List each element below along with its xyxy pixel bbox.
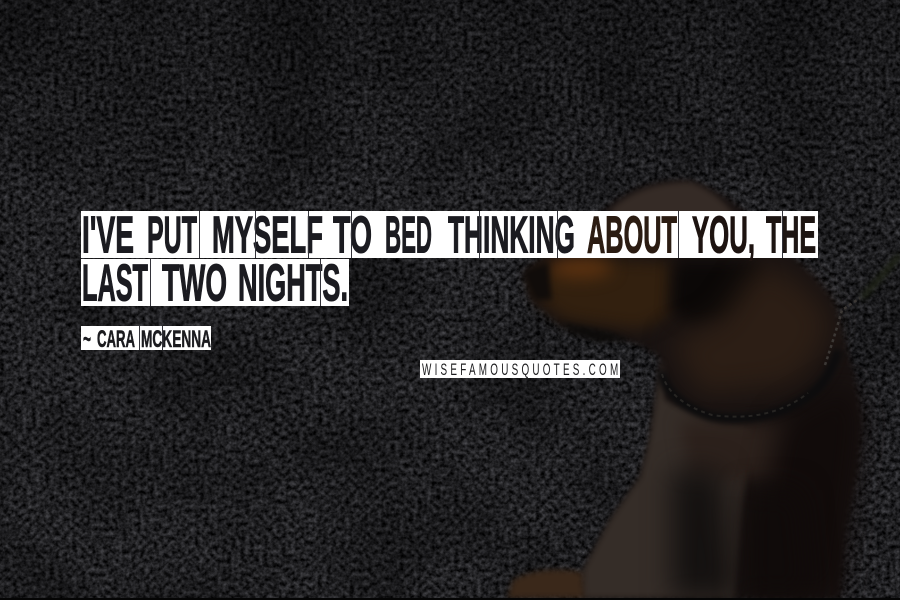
quote line 1: TO xyxy=(333,207,372,265)
muzzle warm patch xyxy=(548,258,612,278)
quote line 1: BED xyxy=(385,207,432,265)
chest light fur xyxy=(582,360,750,598)
neck fur xyxy=(670,262,830,395)
author attribution: CARA xyxy=(97,326,135,353)
quote line 1: MYSELF xyxy=(212,207,323,265)
quote text block xyxy=(81,207,818,312)
quote line 2: TWO xyxy=(162,254,227,312)
quote line 1: I'VE xyxy=(82,207,134,265)
dog photograph xyxy=(507,180,900,598)
quote line 1: THINKING xyxy=(448,207,575,265)
quote line 2 xyxy=(81,254,349,312)
upper chest warm fur xyxy=(680,420,800,480)
quote line 1 xyxy=(81,207,818,265)
ear xyxy=(672,262,770,325)
author attribution: MCKENNA xyxy=(141,326,211,353)
second front leg xyxy=(745,490,810,598)
dog body silhouette xyxy=(524,180,862,598)
muzzle xyxy=(530,258,672,330)
jaw shadow xyxy=(560,322,630,343)
right body shadow xyxy=(745,380,862,598)
author attribution: ~ xyxy=(83,326,91,353)
quote line 1: ABOUT xyxy=(587,207,677,265)
collar xyxy=(661,350,838,418)
front leg shadow xyxy=(672,470,735,598)
forehead highlight xyxy=(610,182,735,225)
quote line 2: LAST xyxy=(82,254,148,312)
nose xyxy=(523,262,552,300)
quote line 1: PUT xyxy=(147,207,197,265)
leash xyxy=(862,255,900,298)
quote line 2: NIGHTS. xyxy=(238,254,348,312)
quote line 1: THE xyxy=(766,207,816,265)
author attribution xyxy=(81,326,211,353)
collar chain xyxy=(662,298,860,417)
bottom edge strip xyxy=(0,598,900,600)
quote line 1: YOU, xyxy=(692,207,755,265)
watermark: site name: WISEFAMOUSQUOTES.COM xyxy=(422,360,618,379)
haunch paw xyxy=(507,570,584,598)
